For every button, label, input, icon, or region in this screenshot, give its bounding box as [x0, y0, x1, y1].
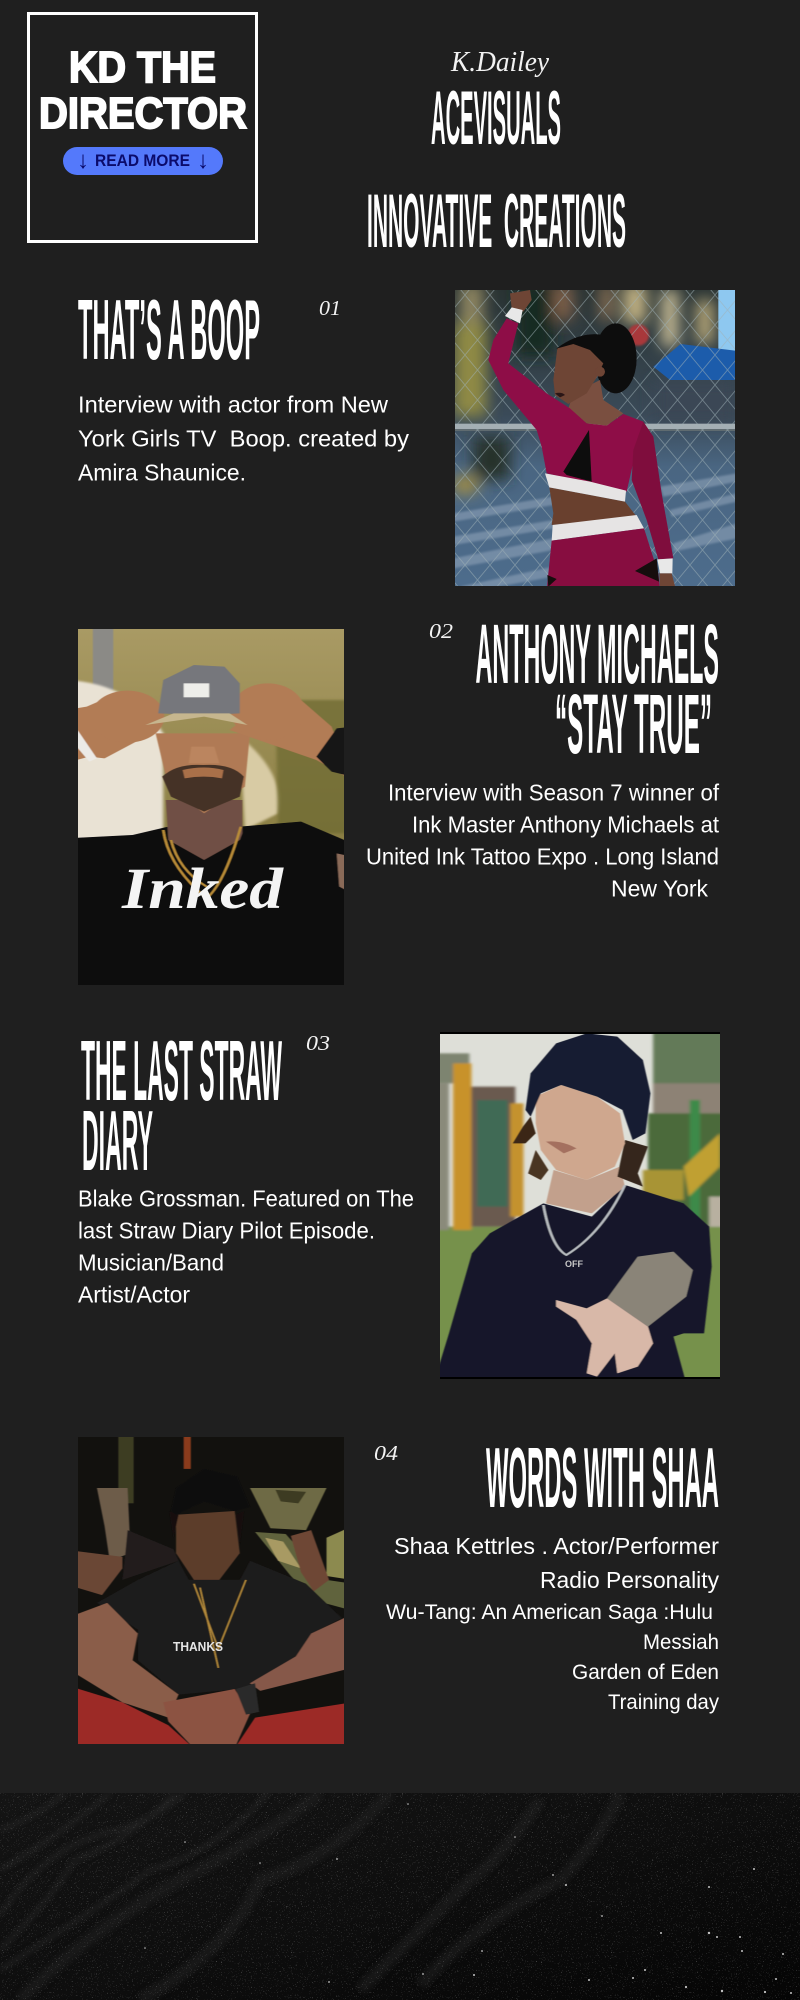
- chain-link mesh: [440, 280, 800, 1240]
- logo title: DIRECTOR: [39, 89, 247, 138]
- number 01: 01: [319, 296, 341, 320]
- logo box: KD The Director: [28, 14, 256, 242]
- fence rail: [453, 424, 737, 431]
- number 04: 04: [374, 1441, 399, 1465]
- header: brand names: [367, 46, 626, 264]
- shirt print: OFF: [565, 1259, 583, 1269]
- shirt logo: Inked: [121, 856, 284, 921]
- description: Musician/Band: [78, 1250, 224, 1276]
- description: Wu-Tang: An American Saga :Hulu: [386, 1601, 713, 1624]
- description: Training day: [608, 1691, 719, 1714]
- description: [78, 1186, 414, 1308]
- read more button: ↓: [197, 147, 209, 174]
- description: Messiah: [643, 1631, 719, 1654]
- man: [66, 665, 352, 990]
- panel: 03 The Last Straw Diary: [78, 1024, 730, 1383]
- description: New York: [611, 876, 708, 902]
- number 03: 03: [306, 1031, 330, 1055]
- logo title: [39, 43, 247, 138]
- description: [366, 780, 720, 902]
- top and bottom black edges: [440, 1032, 720, 1034]
- panel: 02 Anthony Michaels: [66, 607, 720, 990]
- read more button: READ MORE: [95, 151, 190, 170]
- read more button: ↓: [77, 147, 89, 174]
- photo: man in grey cap and black Inked shirt: [78, 629, 344, 985]
- bystanders and camouflage: [184, 1434, 191, 1469]
- photo: seated man in black cap and red pants: [78, 1437, 344, 1744]
- heading: [476, 607, 719, 771]
- description: last Straw Diary Pilot Episode.: [78, 1218, 375, 1244]
- footer band: black sand texture: [0, 1793, 800, 2000]
- description: Ink Master Anthony Michaels at: [412, 812, 720, 838]
- heading: [81, 1024, 282, 1189]
- description: [78, 392, 410, 486]
- stop sign, sky and awning: [628, 324, 649, 346]
- description: United Ink Tattoo Expo . Long Island: [366, 844, 719, 870]
- logo frame: [28, 14, 256, 242]
- number 02: 02: [429, 619, 454, 643]
- description: Garden of Eden: [572, 1661, 719, 1684]
- heading: DIARY: [82, 1094, 153, 1189]
- description: Blake Grossman. Featured on The: [78, 1186, 414, 1212]
- photo: man in beanie pointing at camera: [440, 1032, 720, 1379]
- description: Amira Shaunice.: [78, 460, 246, 486]
- photo: woman in magenta outfit at chain-link fence: [455, 290, 735, 586]
- description: Radio Personality: [540, 1567, 719, 1593]
- description: Artist/Actor: [78, 1282, 190, 1308]
- playground background: [434, 1030, 730, 1383]
- woman: [488, 290, 676, 590]
- man: [434, 1033, 712, 1383]
- panel: 01 That's a Boop: [78, 280, 800, 1240]
- description: Shaa Kettrles . Actor/Performer: [394, 1533, 719, 1559]
- description: Interview with Season 7 winner of: [388, 780, 720, 806]
- shirt print: THANKS: [173, 1639, 223, 1654]
- man: [66, 1685, 352, 1748]
- blurred street background: [453, 283, 737, 493]
- description: York Girls TV Boop. created by: [78, 426, 410, 452]
- logo title: KD THE: [69, 43, 216, 92]
- road stripes: [453, 473, 737, 590]
- pipe and walls: [93, 627, 113, 690]
- panel: 04 Words With Shaa: [66, 1431, 719, 1748]
- description: [386, 1533, 719, 1714]
- read more button: [63, 147, 223, 175]
- description: Interview with actor from New: [78, 392, 388, 418]
- panel: 01 That's a Boop: THAT’S A BOOP: [78, 283, 260, 378]
- author name: K.Dailey: [450, 46, 549, 78]
